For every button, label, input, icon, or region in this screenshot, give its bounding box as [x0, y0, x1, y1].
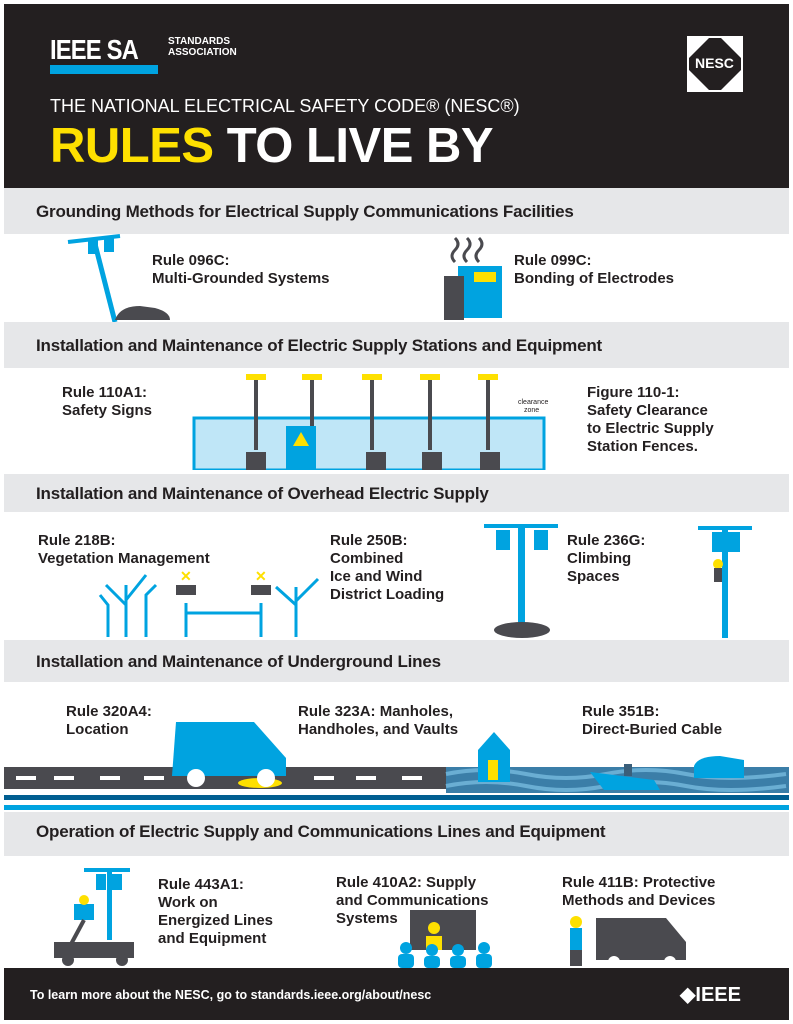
rule 218B: Vegetation Management — [38, 550, 210, 567]
rule 099C: Bonding of Electrodes — [514, 270, 674, 287]
band: overhead — [4, 474, 789, 512]
illustration: climbing pole — [698, 526, 752, 638]
illustration: worker and van — [570, 916, 686, 966]
rule 411B: Methods and Devices — [562, 892, 715, 909]
logo: IEEE SA: IEEE SA — [50, 34, 138, 65]
band: overhead: Installation and Maintenance of Overhead Electric Supply — [36, 484, 489, 503]
rule 323A: Rule 323A: Manholes, — [298, 703, 453, 720]
band: underground: Installation and Maintenance of Underground Lines — [36, 652, 441, 671]
rule 320A4: Rule 320A4: — [66, 703, 152, 720]
rule 320A4 — [66, 703, 152, 738]
header: STANDARDS — [168, 36, 230, 47]
icon: grill — [444, 237, 502, 320]
logo: IEEE: ◆IEEE — [680, 984, 741, 1006]
illustration: fenced substation: zone — [524, 407, 539, 414]
rule 443A1: and Equipment — [158, 930, 266, 947]
rule 410A2: Systems — [336, 910, 398, 927]
illustration: trees and poles — [98, 568, 319, 637]
header: ASSOCIATION — [168, 47, 237, 58]
figure 110-1: Figure 110-1: — [587, 384, 680, 401]
rule 250B: Ice and Wind — [330, 568, 422, 585]
rule 099C: Rule 099C: — [514, 252, 592, 269]
rule 236G: Rule 236G: — [567, 532, 645, 549]
figure 110-1: Station Fences. — [587, 438, 698, 455]
rule 323A: Handholes, and Vaults — [298, 721, 458, 738]
rule 236G — [567, 532, 645, 585]
band: grounding — [4, 188, 789, 234]
rule 323A — [298, 703, 458, 738]
title: RULES TO LIVE BY — [50, 119, 493, 173]
rule 218B — [38, 532, 210, 567]
illustration: road, van, flood, cables — [4, 722, 789, 810]
figure 110-1 — [587, 384, 714, 455]
rule 320A4: Location — [66, 721, 128, 738]
footer — [4, 968, 789, 1020]
band: grounding: Grounding Methods for Electrical Supply Communications Facilities — [36, 202, 574, 221]
logo: NESC: NESC — [695, 55, 734, 71]
subtitle: THE NATIONAL ELECTRICAL SAFETY CODE® (NESC®) — [50, 96, 520, 116]
figure 110-1: Safety Clearance — [587, 402, 708, 419]
illustration: trees and poles: ✕ — [180, 568, 192, 584]
figure 110-1: to Electric Supply — [587, 420, 714, 437]
illustration: fenced substation: clearance — [518, 399, 548, 406]
rule 443A1 — [158, 876, 273, 947]
rule 443A1: Rule 443A1: — [158, 876, 244, 893]
band: underground — [4, 640, 789, 682]
rule 443A1: Energized Lines — [158, 912, 273, 929]
rule 096C — [152, 252, 330, 287]
band: stations — [4, 322, 789, 368]
rule 110A1: Safety Signs — [62, 402, 152, 419]
rule 099C — [514, 252, 674, 287]
rule 250B — [330, 532, 444, 603]
rule 250B: District Loading — [330, 586, 444, 603]
illustration: bucket truck — [54, 868, 134, 966]
rule 351B: Rule 351B: — [582, 703, 660, 720]
rule 411B — [562, 874, 715, 909]
logo: NESC — [687, 36, 743, 92]
rule 351B: Direct-Buried Cable — [582, 721, 722, 738]
rule 236G: Spaces — [567, 568, 620, 585]
rule 096C: Rule 096C: — [152, 252, 230, 269]
rule 411B: Rule 411B: Protective — [562, 874, 715, 891]
band: operation: Operation of Electric Supply and Communications Lines and Equipment — [36, 822, 605, 841]
icon: pole with car — [68, 234, 170, 322]
rule 110A1 — [62, 384, 152, 419]
header — [4, 4, 789, 188]
rule 236G: Climbing — [567, 550, 631, 567]
rule 218B: Rule 218B: — [38, 532, 116, 549]
illustration: training audience — [398, 910, 492, 968]
footer: To learn more about the NESC, go to standards.ieee.org/about/nesc — [30, 988, 431, 1002]
band: operation — [4, 812, 789, 856]
illustration: trees and poles: ✕ — [255, 568, 267, 584]
rule 250B: Combined — [330, 550, 403, 567]
illustration: fenced substation — [192, 374, 548, 470]
illustration: iced pole — [484, 524, 558, 638]
rule 443A1: Work on — [158, 894, 218, 911]
rule 410A2 — [336, 874, 489, 927]
rule 351B — [582, 703, 722, 738]
band: stations: Installation and Maintenance of Electric Supply Stations and Equipment — [36, 336, 602, 355]
rule 410A2: and Communications — [336, 892, 489, 909]
rule 110A1: Rule 110A1: — [62, 384, 147, 401]
rule 410A2: Rule 410A2: Supply — [336, 874, 476, 891]
rule 250B: Rule 250B: — [330, 532, 408, 549]
rule 096C: Multi-Grounded Systems — [152, 270, 330, 287]
